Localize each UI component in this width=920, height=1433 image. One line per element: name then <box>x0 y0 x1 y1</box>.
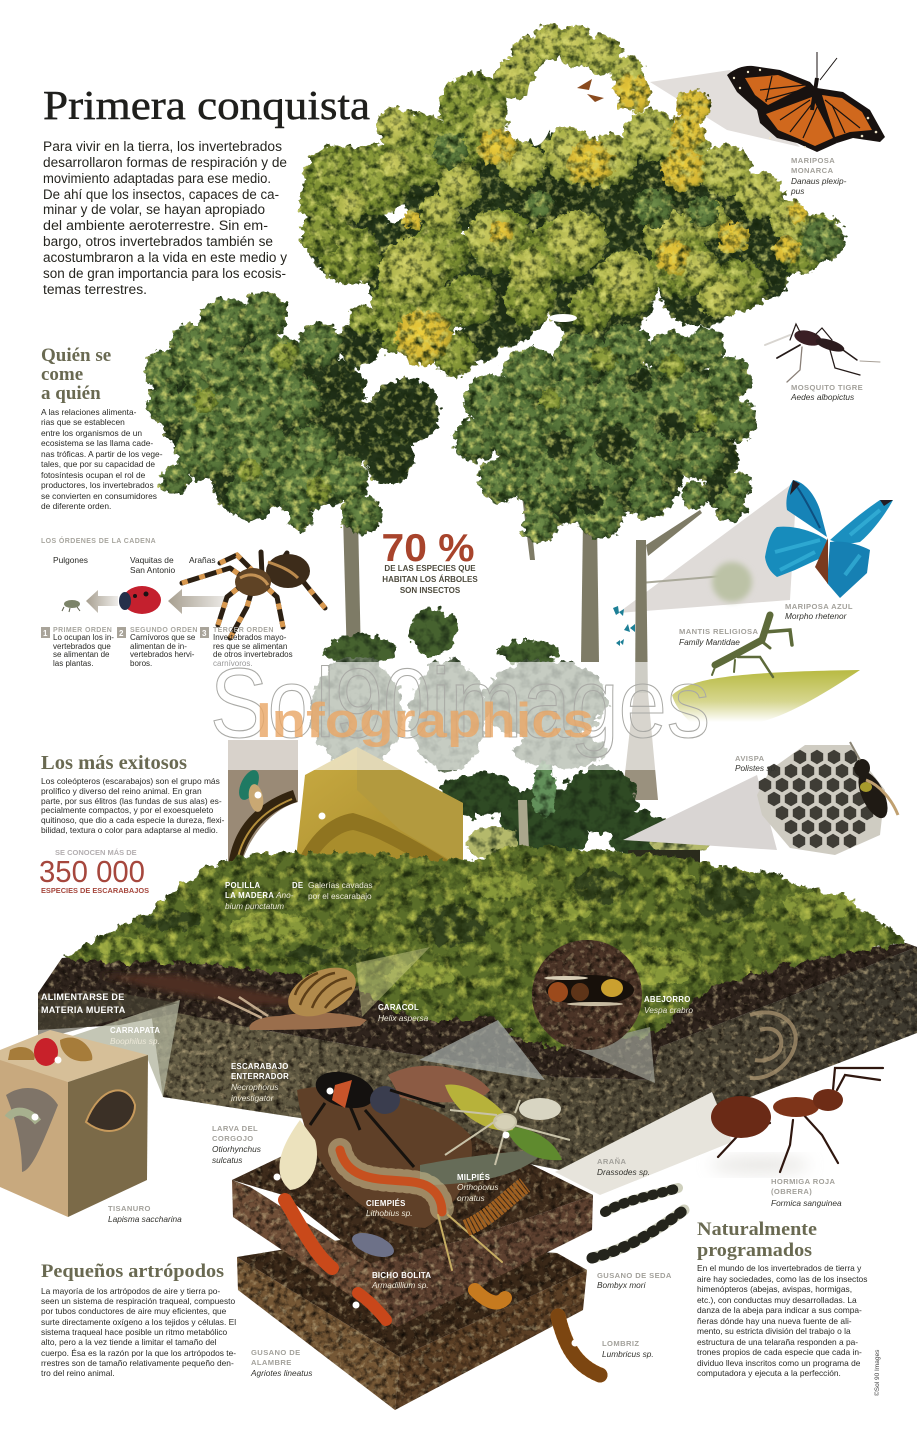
label: monarch: Danaus plexip- <box>791 176 847 186</box>
label: spider: ARAÑA <box>597 1157 627 1166</box>
label: spider <box>597 1157 650 1177</box>
label: spider: Drassodes sp. <box>597 1167 650 1177</box>
label: silk worm <box>597 1271 672 1290</box>
label: mantis: Family Mantidae <box>679 637 740 647</box>
text block: introduction: son de gran importancia para los ecosis- <box>43 266 286 281</box>
order 2: vertebrados hervi- <box>130 650 195 659</box>
dark undergrowth strip <box>628 850 700 870</box>
insect: red tick <box>34 1038 58 1066</box>
panel: soil stack <box>232 1066 600 1410</box>
label: weevil larva: LARVA DEL <box>212 1124 258 1133</box>
text block: social insects: estructura de una telaraña responden a pa- <box>697 1337 858 1347</box>
text block: food chains: tales, que por su capacidad de <box>41 459 155 469</box>
heading: Quién se come a quién <box>41 345 111 404</box>
order 1 <box>41 627 114 668</box>
canopy gaps <box>527 74 618 322</box>
label: eating dead matter: MATERIA MUERTA <box>41 1005 126 1015</box>
text block: introduction: movimiento adaptadas para ese medio. <box>43 171 271 186</box>
wedge: bumblebee right <box>571 1027 655 1083</box>
arrow: ladybug to spider <box>168 589 228 614</box>
label: millipede: ornatus <box>457 1193 485 1203</box>
label: red ant <box>771 1177 842 1208</box>
label: red ant: HORMIGA ROJA <box>771 1177 836 1186</box>
label: mantis: MANTIS RELIGIOSA <box>679 627 759 636</box>
insect: pill bug <box>349 1228 397 1262</box>
label: tick: CARRAPATA <box>110 1026 160 1035</box>
label: snail <box>378 1003 429 1023</box>
order 1: se alimentan de <box>53 650 110 659</box>
chain species labels: Pulgones <box>53 555 88 565</box>
label: bumblebee: ABEJORRO <box>644 995 691 1004</box>
soil layer: lower block faces <box>237 1257 587 1410</box>
label: red ant: (OBRERA) <box>771 1187 812 1196</box>
panel: wood pieces with beetle galleries <box>228 740 463 868</box>
label: wood moth: LA MADERA <box>225 891 274 900</box>
soil: reddish band <box>100 975 330 1005</box>
panel: soil wedges <box>38 947 796 1195</box>
order 3: carnívoros. <box>213 659 253 668</box>
heading: Quién se come a quién: come <box>41 364 83 385</box>
insect: silk worm upper <box>605 1188 678 1212</box>
label: eating dead matter <box>41 992 126 1015</box>
heading: Quién se come a quién: a quién <box>41 383 101 404</box>
heading: Pequeños artrópodos: Pequeños artrópodos <box>41 1261 224 1282</box>
label: burying beetle: ENTERRADOR <box>231 1072 289 1081</box>
order 2: 2 <box>119 629 124 638</box>
callout wedge: monarch butterfly <box>650 70 800 147</box>
label: wood moth: POLILLA <box>225 881 261 890</box>
ground: moss surface <box>62 845 906 1047</box>
chain heading: LOS ÓRDENES DE LA CADENA <box>41 536 156 545</box>
text block: small arthropods: tro del reino animal. <box>41 1368 115 1378</box>
wood piece: moth gallery <box>228 740 298 868</box>
heading: Naturalmente programados <box>697 1220 817 1261</box>
label: burying beetle <box>231 1062 289 1103</box>
text block: food chains: nas tróficas. A partir de los vege- <box>41 449 163 459</box>
label: mosquito: MOSQUITO TIGRE <box>791 383 863 392</box>
insect: tarantula <box>182 552 325 638</box>
chain species labels: Arañas <box>189 555 216 565</box>
faded branch cluster <box>640 562 752 602</box>
panel: grass strip with mantis <box>672 615 860 722</box>
text block: introduction: De ahí que los insectos, capaces de ca- <box>43 187 279 202</box>
text block: introduction: desarrollaron formas de respiración y de <box>43 155 287 170</box>
trunk: flared base <box>622 693 658 800</box>
label: monarch <box>790 156 847 196</box>
tree: lower right canopy <box>453 324 757 543</box>
text block: food chains: rias que se establecen <box>41 417 125 427</box>
wedge: snail <box>356 947 430 1017</box>
insect: small monarch pair <box>577 79 604 102</box>
label: wood moth: DE <box>292 881 303 890</box>
label: blue butterfly: Morpho rhetenor <box>785 611 848 621</box>
label: millipede: MILPIÉS <box>457 1173 490 1182</box>
order 3: TERCER ORDEN <box>213 627 274 634</box>
label: monarch: MONARCA <box>791 166 834 175</box>
label: blue butterfly: MARIPOSA AZUL <box>785 602 853 611</box>
insect: burying beetle <box>310 1066 445 1167</box>
text block: social insects: danza de la abeja para indicar a sus compa- <box>697 1305 862 1315</box>
callout: 70 percent: 70 % <box>382 527 474 570</box>
text block: small arthropods: rrestres son de tamaño relativamente pequeño den- <box>41 1358 234 1368</box>
heading: Naturalmente programados: Naturalmente <box>697 1220 817 1240</box>
text block: social insects: computadora y ejecuta a la perfección. <box>697 1368 841 1378</box>
text block: small arthropods: La mayoría de los artrópodos de aire y tierra po- <box>41 1286 220 1296</box>
label: silverfish: Lapisma saccharina <box>108 1214 182 1224</box>
tree trunks <box>343 480 702 700</box>
text block: food chains: de diferente orden. <box>41 501 111 511</box>
callout: 70 percent: SON INSECTOS <box>400 586 461 595</box>
label: bumblebee <box>644 995 693 1015</box>
wing outlines <box>727 66 817 112</box>
text block: small arthropods: seen un sistema de respiración traqueal, compuesto <box>41 1296 235 1306</box>
callout: 350 000 beetle species: SE CONOCEN MÁS DE <box>55 848 137 857</box>
label: mosquito: Aedes albopictus <box>790 392 854 402</box>
insect: wasp <box>850 742 898 822</box>
icon: bumblebee nest circle <box>532 940 642 1050</box>
text block: introduction: minar y de volar, se hayan apropiado <box>43 202 265 217</box>
label: wireworm: Agriotes lineatus <box>250 1368 312 1378</box>
label: silverfish <box>108 1204 182 1224</box>
label: pill bug: Armadillium sp. <box>371 1280 429 1290</box>
label: burying beetle: ESCARABAJO <box>231 1062 289 1071</box>
text block: introduction: Para vivir en la tierra, los invertebrados <box>43 139 282 154</box>
wing veins <box>760 76 860 138</box>
text block: introduction: del ambiente aeroterrestre. Sin em- <box>43 218 268 233</box>
insect: centipede <box>340 1150 502 1270</box>
label: silk worm: Bombyx mori <box>597 1280 647 1290</box>
soil layer: upper block top <box>232 1100 593 1263</box>
understory: ferns below the band <box>440 762 710 863</box>
label: earthworm: Lumbricus sp. <box>602 1349 654 1359</box>
text block: social insects: En el mundo de los invertebrados de tierra y <box>697 1263 862 1273</box>
soil layer: lower block top <box>237 1240 587 1357</box>
text block: beetles: parte, por sus élitros (las fundas de sus alas) es- <box>41 796 222 806</box>
label: pill bug <box>371 1271 431 1290</box>
label: silk worm: GUSANO DE SEDA <box>597 1271 672 1280</box>
label: burying beetle: Necrophorus <box>231 1082 279 1092</box>
text block: beetles: bilidad, textura o color para adaptarse al medio. <box>41 825 218 835</box>
text block: introduction: bargo, otros invertebrados también se <box>43 234 273 249</box>
label: earthworm <box>602 1339 654 1359</box>
heading: Los más exitosos: Los más exitosos <box>41 752 187 774</box>
text block: introduction <box>43 139 287 297</box>
soil: dark upper layer <box>38 943 917 1080</box>
credit: ©Sol 90 Images <box>873 1349 881 1396</box>
text block: beetles: prolífico y diverso del reino animal. En gran <box>41 786 202 796</box>
chain species labels: Vaquitas de <box>130 555 174 565</box>
arrow: aphid to ladybug <box>86 590 118 613</box>
watermark: Infographics: Infographics <box>256 694 594 748</box>
text block: social insects: aire hay sociedades, como las de los insectos <box>697 1274 867 1284</box>
insect: wood moth <box>235 767 265 813</box>
label: beetle galleries: Galerías cavadas <box>308 880 373 890</box>
label: monarch: MARIPOSA <box>791 156 835 165</box>
text block: introduction: temas terrestres. <box>43 282 147 297</box>
soil layer: upper block faces <box>232 1180 593 1327</box>
band: watermark wash <box>212 662 717 770</box>
label: tick: Boophilus sp. <box>110 1036 160 1046</box>
text block: food chains: fotosíntesis ocupan el rol de <box>41 470 146 480</box>
order 3: 3 <box>202 629 207 638</box>
order 2: SEGUNDO ORDEN <box>130 627 198 634</box>
insect: silk worm lower <box>592 1210 684 1258</box>
heading: Naturalmente programados: programados <box>697 1241 812 1261</box>
callout: 70 percent: DE LAS ESPECIES QUE <box>384 564 476 573</box>
label: snail: Helix aspersa <box>378 1013 429 1023</box>
label: wood moth: Ano- <box>275 890 294 900</box>
order 2: alimentan de in- <box>130 642 187 651</box>
insect: earthworm <box>558 1316 600 1375</box>
ground: soil section <box>38 943 917 1170</box>
text block: food chains: entre los organismos de un <box>41 428 142 438</box>
label: wasp <box>735 754 777 773</box>
wedge: bumblebee left <box>419 1020 545 1080</box>
text block: small arthropods <box>41 1286 236 1378</box>
text block: small arthropods: sistema traqueal hace posible un ritmo metabólico <box>41 1327 228 1337</box>
label: tick <box>110 1026 160 1046</box>
tree: left canopy <box>145 292 439 535</box>
text block: social insects <box>697 1263 867 1378</box>
order 2: Carnívoros que se <box>130 633 196 642</box>
text block: food chains: ecosistema se las llama cade- <box>41 438 153 448</box>
label: burying beetle: investigator <box>231 1093 275 1103</box>
text block: small arthropods: alto, pero a la vez tiende a limitar el tamaño del <box>41 1337 217 1347</box>
label: eating dead matter: ALIMENTARSE DE <box>41 992 125 1002</box>
order 2 <box>117 627 198 668</box>
text block: beetles: Los coleópteros (escarabajos) son el grupo más <box>41 776 220 786</box>
label: bumblebee: Vespa crabro <box>644 1005 693 1015</box>
callout: 350 000 beetle species: ESPECIES DE ESCARABAJOS <box>41 886 149 895</box>
insect: millipede <box>466 1185 525 1228</box>
insect: monarch butterfly <box>727 52 885 152</box>
leaf litter <box>297 1066 562 1228</box>
insect: wireworm <box>285 1200 332 1268</box>
text block: beetles: quitinoso, que dio a cada especie la dureza, flexi- <box>41 815 225 825</box>
label: wood moth <box>225 881 303 911</box>
text block: social insects: ñeras dónde hay una nueva fuente de ali- <box>697 1316 852 1326</box>
insect: wireworm lower <box>358 1293 386 1320</box>
fern trunk <box>518 800 530 875</box>
text block: social insects: mento, su estricta división del trabajo o la <box>697 1326 851 1336</box>
text block: small arthropods: cuerpo. Ésa es la razón por la que los artrópodos te- <box>41 1348 236 1358</box>
text block: social insects: etc.), con conductas muy desarrolladas. La <box>697 1295 857 1305</box>
callout: 70 percent: HABITAN LOS ÁRBOLES <box>382 575 478 584</box>
text block: beetles: pecialmente compactos, y por el exoesqueleto <box>41 805 214 815</box>
text block: food chains: se convierten en consumidores <box>41 491 157 501</box>
wing spots <box>733 69 877 148</box>
chain species labels <box>53 555 216 575</box>
title: Primera conquista <box>43 82 370 128</box>
chain species labels: San Antonio <box>130 565 176 575</box>
label: monarch: pus <box>790 186 804 196</box>
insect: ladybug <box>119 586 161 614</box>
order 3: res que se alimentan <box>213 642 287 651</box>
soil: ant gallery maze <box>750 1012 796 1078</box>
label: weevil larva: Otiorhynchus <box>212 1144 261 1154</box>
insect: red ant <box>710 1068 883 1173</box>
label: silverfish: TISANURO <box>108 1204 151 1213</box>
wedge: burrow block <box>60 1000 180 1097</box>
order 1: las plantas. <box>53 659 93 668</box>
heading: Quién se come a quién: Quién se <box>41 345 111 366</box>
insect: tiger mosquito <box>765 324 880 382</box>
label: wireworm: ALAMBRE <box>251 1358 292 1367</box>
insect: aphid <box>62 600 80 612</box>
insect: orange grub <box>475 1290 505 1303</box>
text block: social insects: trones propios de cada especie que cada in- <box>697 1347 862 1357</box>
wing orange cells <box>745 75 872 146</box>
label: pill bug: BICHO BOLITA <box>372 1271 431 1280</box>
label: mantis <box>679 627 759 647</box>
text block: beetles <box>41 776 225 835</box>
order 2: boros. <box>130 659 152 668</box>
label: wasp: Polistes sp. <box>735 763 777 773</box>
label: wireworm <box>250 1348 312 1378</box>
label: millipede <box>457 1173 499 1203</box>
order 1: 1 <box>43 629 48 638</box>
label: weevil larva: sulcatus <box>212 1155 242 1165</box>
insect: snail <box>218 958 367 1030</box>
label: red ant: Formica sanguinea <box>771 1198 842 1208</box>
label: millipede: Orthoporus <box>457 1182 499 1192</box>
order 1: Lo ocupan los in- <box>53 633 114 642</box>
label: weevil larva: CORGOJO <box>212 1134 254 1143</box>
text block: food chains: A las relaciones alimenta- <box>41 407 137 417</box>
order 3: de otros invertebrados <box>213 650 293 659</box>
label: blue butterfly <box>785 602 853 621</box>
wedge: ant <box>555 1092 732 1195</box>
order 3 <box>200 627 293 668</box>
text block: introduction: acostumbraron a la vida en este medio y <box>43 250 287 265</box>
label: mosquito <box>790 383 863 402</box>
label: wasp: AVISPA <box>735 754 765 763</box>
icon: cube cavities <box>6 1037 135 1172</box>
watermark: Sol90images <box>210 648 710 758</box>
callout: 70 percent <box>382 527 478 595</box>
label: weevil larva <box>212 1124 261 1165</box>
callout: 350 000 beetle species: 350 000 <box>39 854 145 889</box>
label: snail: CARACOL <box>378 1003 419 1012</box>
insect: weevil larva <box>279 1120 317 1190</box>
order 1: vertebrados que <box>53 642 111 651</box>
callout wedge: wasp nest <box>623 775 777 850</box>
label: centipede <box>366 1199 413 1218</box>
insect: pale spider <box>445 1100 570 1165</box>
chart: food chain orders <box>41 536 325 668</box>
text block: social insects: himenópteros (abejas, avispas, hormigas, <box>697 1284 852 1294</box>
insect: blue morpho butterfly <box>765 480 893 598</box>
text block: food chains: productores, los invertebrados <box>41 480 154 490</box>
label: centipede: Lithobius sp. <box>366 1208 413 1218</box>
tree: upper canopy <box>300 24 845 377</box>
panel: burrow block cube <box>0 1030 148 1217</box>
order 3: Invertebrados mayo- <box>213 633 287 642</box>
icon: wasp nest <box>757 745 885 855</box>
text block: small arthropods: surte directamente oxígeno a los tejidos y células. El <box>41 1317 236 1327</box>
label: wireworm: GUSANO DE <box>251 1348 301 1357</box>
text block: social insects: dividuo lleva inscritos como un programa de <box>697 1358 861 1368</box>
callout markers <box>32 792 578 1346</box>
insect: silverfish <box>8 1112 38 1122</box>
text block: food chains <box>41 407 163 511</box>
insect: small blue butterflies <box>613 606 635 646</box>
wood block: beetle galleries <box>295 747 463 868</box>
soil: lighter lower layer <box>150 947 917 1170</box>
label: beetle galleries <box>308 880 373 901</box>
order 1: PRIMER ORDEN <box>53 627 112 634</box>
understory: small trees <box>311 608 607 772</box>
insect: mantis <box>712 615 792 677</box>
callout wedge: blue butterfly <box>618 480 797 613</box>
label: centipede: CIEMPIÉS <box>366 1199 406 1208</box>
text block: small arthropods: por tubos conductores de aire muy eficientes, que <box>41 1306 227 1316</box>
label: beetle galleries: por el escarabajo <box>308 891 372 901</box>
label: earthworm: LOMBRIZ <box>602 1339 639 1348</box>
label: wood moth: bium punctatum <box>225 901 284 911</box>
